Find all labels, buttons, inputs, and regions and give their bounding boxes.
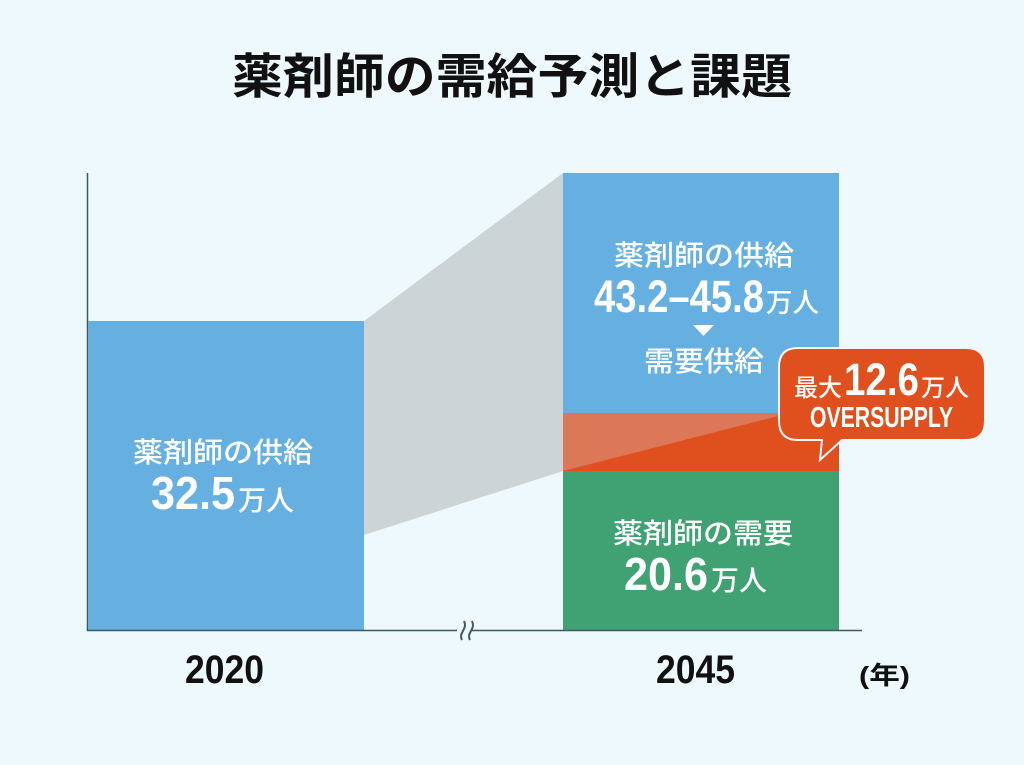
oversupply band [563, 413, 839, 471]
label: 2045 demand [613, 518, 793, 600]
label: 2045 supply: 43.2–45.8 [594, 271, 764, 322]
callout: oversupply: 12.6 [844, 354, 919, 405]
callout: oversupply: 万人 [921, 375, 969, 402]
callout: oversupply [779, 348, 985, 460]
bar: 2045 supply [563, 173, 839, 413]
label: 2045 demand: 20.6 [624, 548, 708, 600]
connector band: supply growth [364, 173, 563, 535]
label: 2020 supply: 万人 [238, 485, 294, 516]
bar: 2045 demand [563, 471, 839, 631]
x label: 2045: 2045 [656, 648, 735, 692]
label: 2045 supply: 薬剤師の供給 [614, 240, 794, 271]
label: 2020 supply: 薬剤師の供給 [133, 437, 313, 468]
callout: oversupply: OVERSUPPLY [810, 402, 953, 434]
x axis with break mark [87, 621, 862, 640]
label: 2020 supply [133, 437, 313, 519]
y axis [86, 173, 88, 631]
label: 2020 supply: 32.5 [151, 467, 235, 519]
label: 2045 supply [594, 240, 819, 377]
x unit: year: (年) [859, 662, 910, 690]
label: 2045 demand: 薬剤師の需要 [613, 518, 793, 549]
x label: 2020: 2020 [185, 648, 264, 692]
bar: 2020 supply [88, 321, 364, 631]
label: 2045 supply: 万人 [766, 288, 819, 318]
label: 2045 supply: 需要供給 [644, 346, 764, 377]
label: 2045 demand: 万人 [711, 565, 767, 596]
callout: oversupply: 最大 [794, 375, 842, 402]
title: 薬剤師の需給予測と課題 [232, 51, 792, 104]
